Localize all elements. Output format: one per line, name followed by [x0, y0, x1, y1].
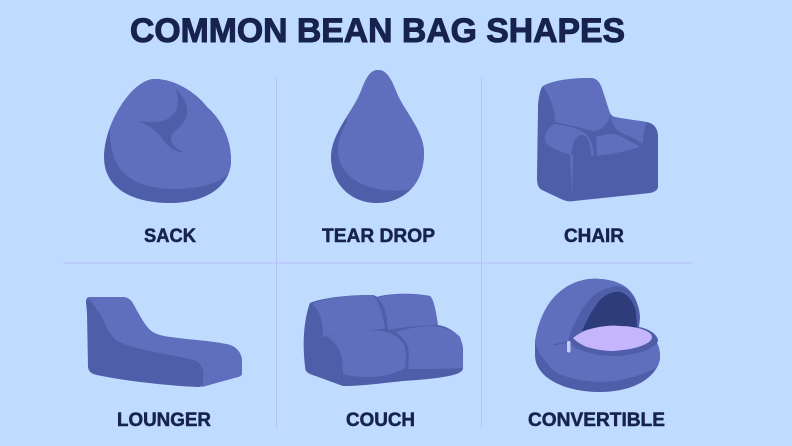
front right cushion	[395, 326, 463, 369]
label: chair: CHAIR	[564, 226, 624, 247]
panel: couch	[304, 294, 463, 431]
panel: tear drop	[322, 60, 435, 247]
icon: convertible bean bag	[535, 278, 660, 392]
chair back cushion	[543, 78, 610, 131]
left back cushion	[312, 295, 385, 337]
panel: convertible	[528, 278, 664, 426]
icon: couch bean bag	[304, 294, 463, 386]
label: lounger: LOUNGER	[117, 410, 211, 431]
front left cushion	[327, 330, 406, 377]
icon: chair bean bag	[537, 78, 658, 201]
chair left arm	[545, 124, 594, 156]
panel: lounger	[86, 297, 242, 431]
label: couch: COUCH	[346, 410, 415, 431]
panel: chair	[537, 78, 658, 247]
panel: sack	[104, 79, 231, 242]
title: COMMON BEAN BAG SHAPES	[130, 12, 625, 50]
chair seat	[596, 134, 640, 156]
zipper pull	[567, 341, 570, 352]
hood rim	[568, 286, 658, 356]
icon: lounger bean bag	[86, 297, 242, 387]
seat cushion	[573, 326, 652, 351]
label: convertible: CONVERTIBLE	[528, 410, 665, 431]
icon: sack bean bag	[104, 79, 231, 203]
label: tear drop: TEAR DROP	[322, 226, 435, 247]
right back cushion	[377, 294, 438, 330]
icon: tear drop bean bag	[331, 70, 424, 203]
hood interior	[582, 292, 637, 331]
label: sack: SACK	[144, 226, 196, 247]
chair right arm	[611, 116, 647, 144]
